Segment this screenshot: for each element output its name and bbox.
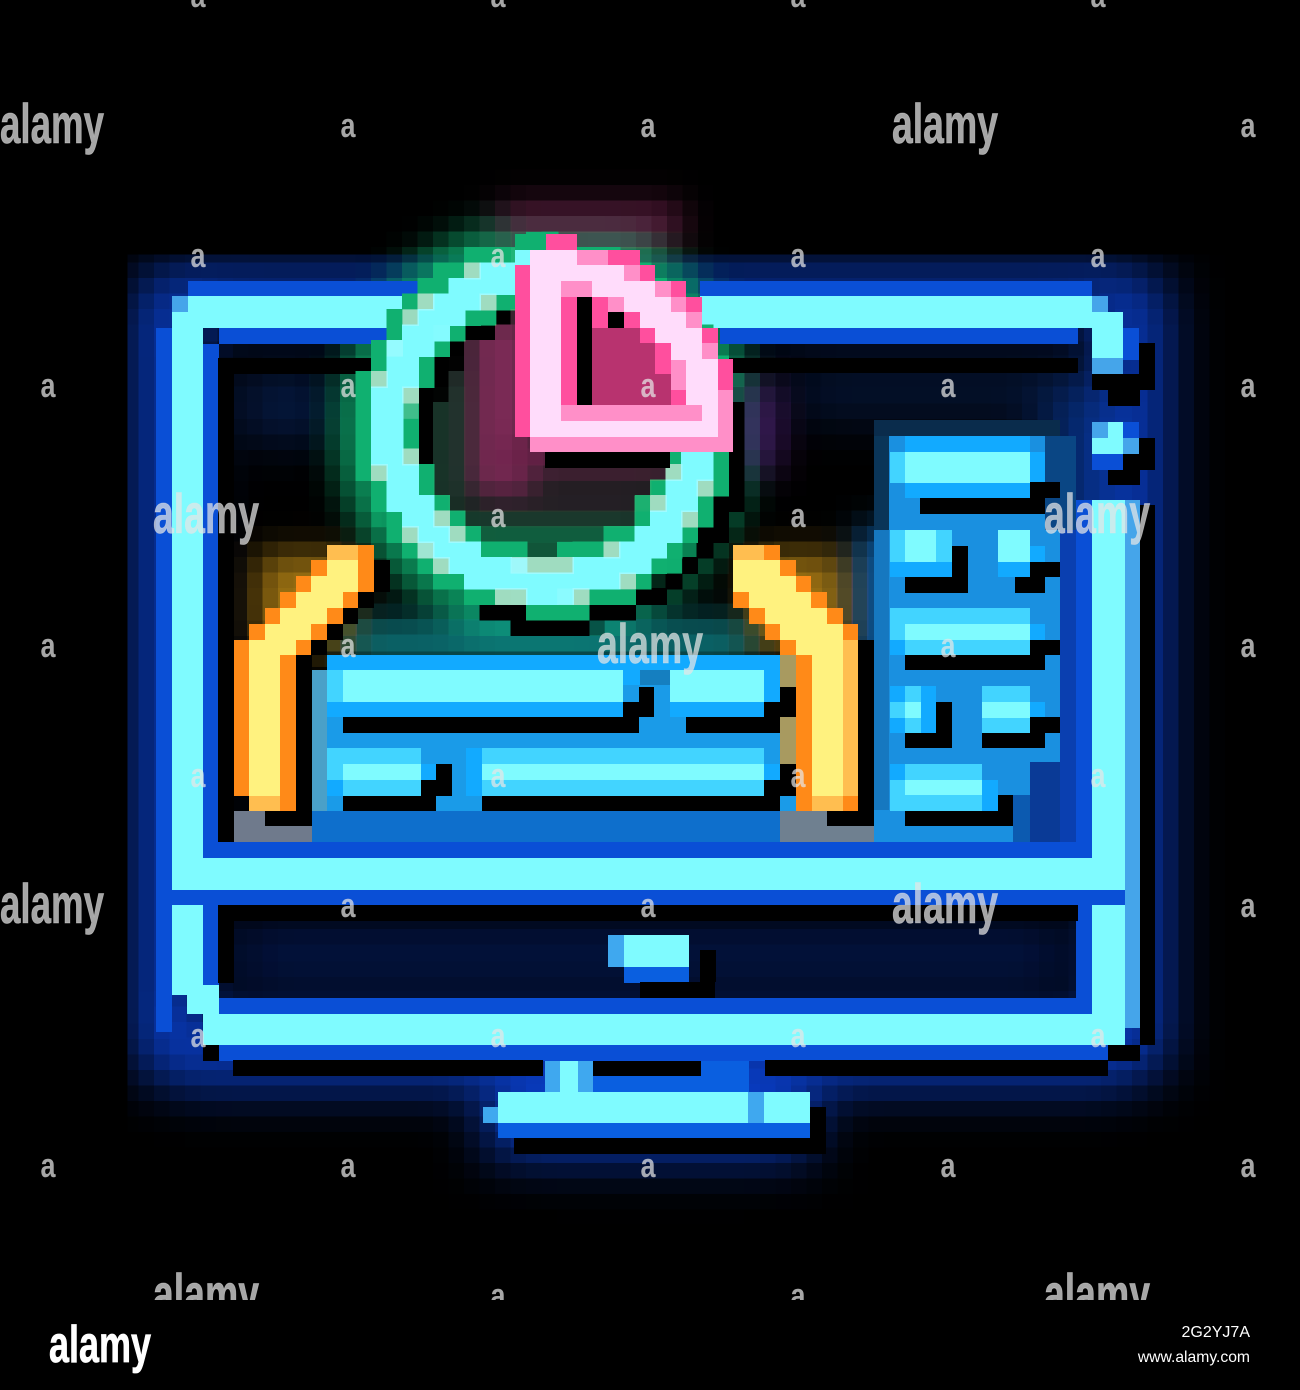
watermark: small a marks: a — [940, 1147, 956, 1185]
watermark: small a marks: a — [490, 1017, 506, 1055]
column row five — [890, 764, 1013, 826]
pie ring and centre — [365, 248, 742, 623]
monitor stand — [483, 1061, 826, 1154]
watermark: large alamy marks: alamy — [153, 1262, 259, 1325]
watermark: large alamy marks: alamy — [1044, 1262, 1150, 1325]
right side text column — [874, 420, 1076, 842]
monitor button — [608, 935, 716, 998]
frame small accents — [1092, 328, 1139, 470]
right amber arc — [733, 545, 874, 826]
watermark: small a marks: a — [190, 237, 206, 275]
watermark: small a marks: a — [490, 1277, 506, 1315]
watermark: small a marks: a — [640, 367, 656, 405]
watermark: large alamy marks: alamy — [892, 872, 998, 935]
text bars: row one — [327, 670, 796, 733]
watermark: small a marks: a — [790, 237, 806, 275]
watermark: small a marks: a — [340, 1147, 356, 1185]
column row four — [890, 686, 1060, 748]
column row two — [890, 530, 1060, 593]
watermark: small a marks: a — [340, 367, 356, 405]
watermark: small a marks: a — [40, 367, 56, 405]
watermark: large alamy marks: alamy — [0, 92, 104, 155]
watermark: small a marks: a — [490, 757, 506, 795]
pie slice — [515, 234, 733, 468]
watermark: large alamy marks: alamy — [892, 92, 998, 155]
alamy logo: alamy — [49, 1316, 151, 1374]
frame black offset shadows — [203, 343, 1155, 1076]
watermark: small a marks: a — [340, 887, 356, 925]
watermark: small a marks: a — [1240, 1147, 1256, 1185]
column row three — [890, 608, 1060, 670]
pie chart circle — [365, 234, 742, 623]
watermark: small a marks: a — [190, 757, 206, 795]
glow: green, pink and amber halo — [258, 208, 900, 820]
watermark: small a marks: a — [640, 1147, 656, 1185]
watermark: small a marks: a — [1090, 1017, 1106, 1055]
watermark: small a marks: a — [340, 107, 356, 145]
watermark: small a marks: a — [1240, 887, 1256, 925]
text bars: row two — [327, 748, 796, 811]
watermark: small a marks: a — [190, 1017, 206, 1055]
watermark: small a marks: a — [640, 107, 656, 145]
left amber arc — [234, 545, 390, 826]
watermark: large alamy marks: alamy — [1044, 482, 1150, 545]
monitor frame — [156, 281, 1155, 1076]
website: www.alamy.com — [1137, 1349, 1250, 1366]
frame cyan bars — [172, 296, 1125, 1045]
bottom credit band — [0, 1300, 1300, 1390]
image id: 2G2YJ7A — [1182, 1324, 1250, 1341]
watermark: large alamy marks: alamy — [153, 482, 259, 545]
watermark: large alamy marks: alamy — [0, 872, 104, 935]
watermark: large alamy marks: alamy — [597, 612, 703, 675]
watermark: small a marks: a — [1240, 367, 1256, 405]
watermark: small a marks: a — [1240, 107, 1256, 145]
watermark: small a marks: a — [940, 367, 956, 405]
watermark: small a marks: a — [940, 627, 956, 665]
glow: monitor blue halo — [140, 272, 1160, 1150]
frame light blue edges — [172, 296, 1140, 1028]
column row one — [890, 436, 1060, 514]
watermark: small a marks: a — [790, 1017, 806, 1055]
watermark: small a marks: a — [490, 497, 506, 535]
frame blue outlines — [156, 281, 1125, 1061]
lower text block panel — [234, 655, 874, 842]
watermark: small a marks: a — [40, 627, 56, 665]
watermark: large alamy marks — [0, 92, 1150, 1325]
watermark: small a marks: a — [40, 1147, 56, 1185]
watermark: small a marks: a — [340, 627, 356, 665]
watermark: small a marks: a — [790, 757, 806, 795]
watermark: small a marks: a — [1090, 237, 1106, 275]
watermark: small a marks: a — [790, 497, 806, 535]
watermark: small a marks: a — [1090, 757, 1106, 795]
watermark: small a marks: a — [1240, 627, 1256, 665]
watermark: small a marks: a — [640, 887, 656, 925]
watermark: small a marks: a — [790, 1277, 806, 1315]
watermark: small a marks: a — [490, 237, 506, 275]
